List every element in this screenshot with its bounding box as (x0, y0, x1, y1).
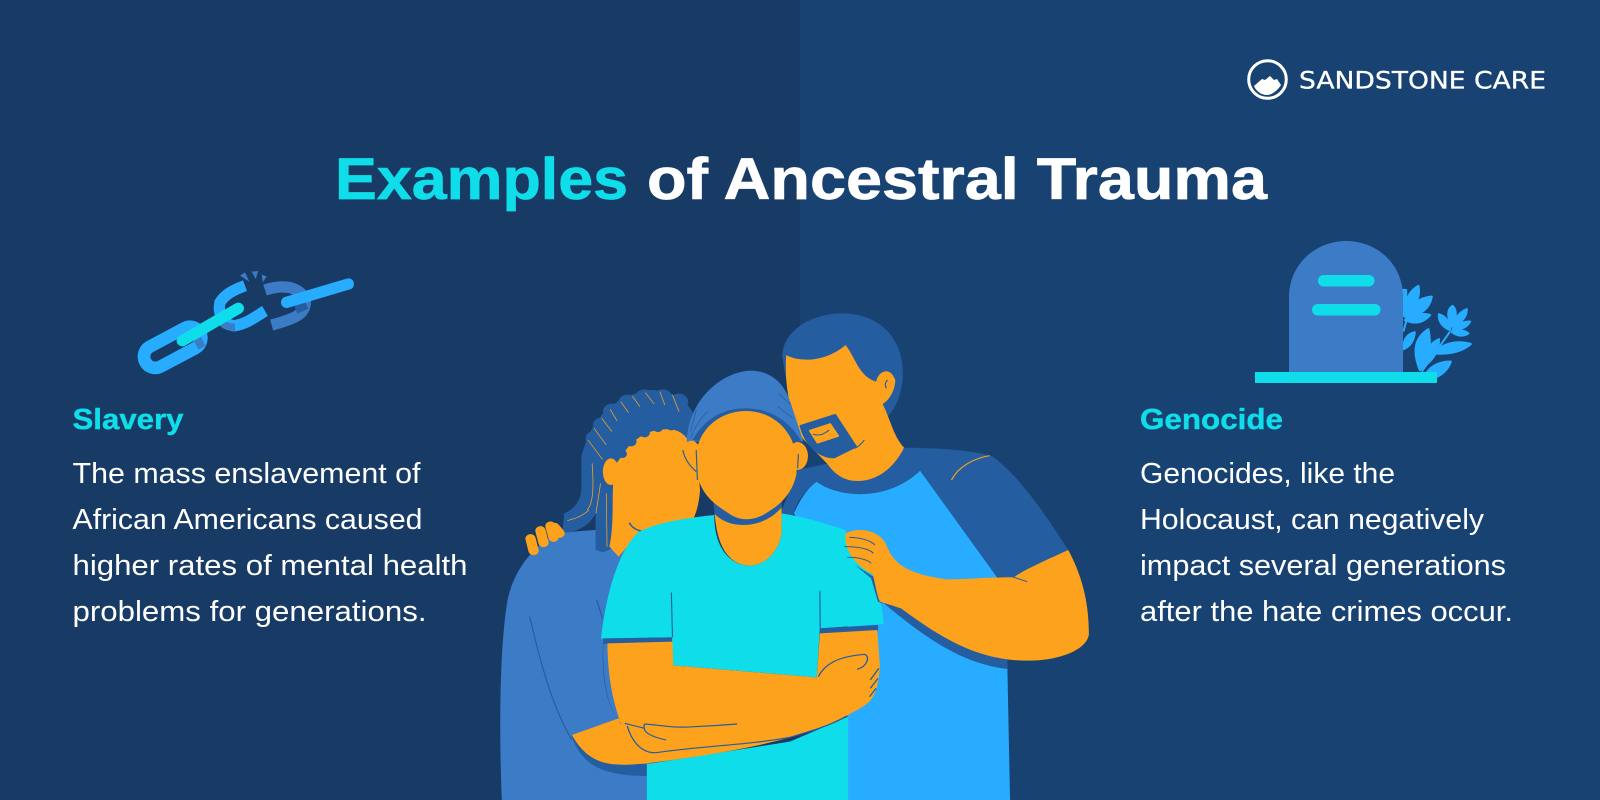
icon: broken chain (140, 271, 348, 372)
panel: left background (0, 0, 800, 800)
text block: Genocide (1140, 404, 1513, 628)
woman's braids outer scallops (586, 389, 688, 446)
woman's hand on shoulder (531, 526, 560, 551)
woman's braids inner scallops (618, 422, 690, 458)
text block: Slavery: higher rates of mental health (72, 550, 468, 582)
hands and arm detail lines (625, 654, 879, 753)
text block: Slavery: African Americans caused (72, 504, 422, 536)
icon: gravestone with flowers (1255, 241, 1471, 383)
text block: Slavery: problems for generations. (72, 596, 426, 628)
title: Examples (335, 147, 628, 212)
panel: right background (800, 0, 1600, 800)
text block: Genocide: impact several generations (1140, 550, 1506, 582)
text block: Slavery: Slavery (72, 404, 184, 436)
title: of Ancestral Trauma (647, 147, 1268, 212)
title (335, 147, 1268, 212)
figure: child in the centre (601, 371, 884, 800)
illustration: family embracing (500, 313, 1089, 800)
text block: Slavery: The mass enslavement of (72, 458, 421, 490)
text block: Slavery (72, 404, 468, 628)
figure: man on the right (780, 313, 1068, 800)
headstone inscription bars (1312, 275, 1380, 316)
text block: Genocide: Genocides, like the (1140, 458, 1395, 490)
figure: man's arm and hand on child's shoulder (844, 530, 1089, 661)
ground bar (1255, 372, 1437, 383)
text block: Genocide: Genocide (1140, 404, 1283, 436)
icon: mountain emblem (1249, 61, 1286, 98)
text block: Genocide: Holocaust, can negatively (1140, 504, 1485, 536)
icon: headstone (1289, 241, 1403, 372)
logo wordmark: SANDSTONE CARE (1299, 66, 1546, 94)
text block: Genocide: after the hate crimes occur. (1140, 596, 1513, 628)
figure: woman on the left (500, 389, 790, 800)
icon: flowers (1402, 286, 1471, 378)
logo: Sandstone Care (1249, 61, 1546, 98)
